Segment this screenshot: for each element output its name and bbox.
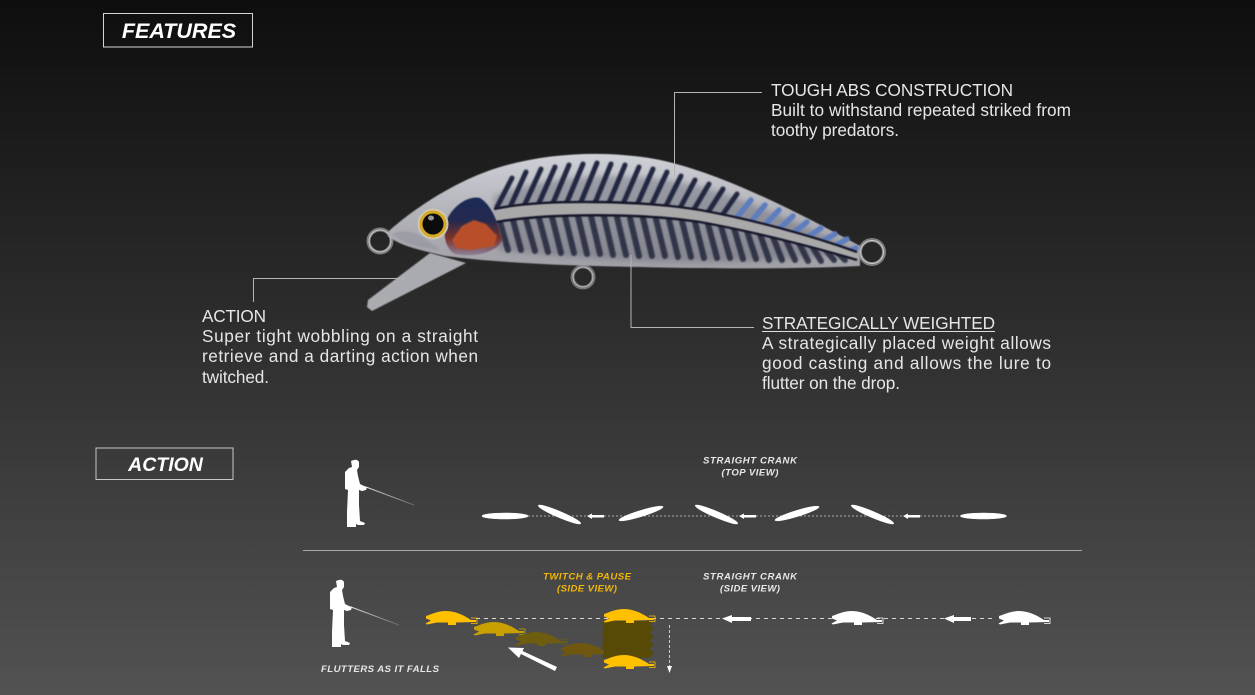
label: flutters: FLUTTERS AS IT FALLS xyxy=(321,664,440,675)
icon: nose ring xyxy=(368,230,392,252)
arrow: rising xyxy=(508,648,557,671)
icon: belly ring xyxy=(572,266,594,288)
side lure white xyxy=(998,611,1050,625)
callout: action: twitched. xyxy=(202,367,269,387)
top view lures xyxy=(482,503,1006,526)
upper blue ribs xyxy=(735,200,856,252)
heading: features: FEATURES xyxy=(122,19,237,43)
label: twitch and pause: TWITCH & PAUSE xyxy=(543,572,632,582)
falling lures xyxy=(426,611,612,657)
heading: action: ACTION xyxy=(127,454,204,476)
top view diagram xyxy=(345,456,1006,527)
lure eye xyxy=(418,208,448,240)
icon: angler xyxy=(345,460,414,527)
lure gill patch xyxy=(445,197,502,255)
lure pale spine band xyxy=(494,202,857,260)
upper ribs xyxy=(497,163,737,217)
yellow lure bottom xyxy=(604,655,655,669)
callout: tough abs construction: toothy predators. xyxy=(771,120,899,140)
lure photo xyxy=(367,154,884,311)
callout: action xyxy=(202,278,478,387)
label: straight crank side view: (SIDE VIEW) xyxy=(720,584,780,594)
callout: strategically weighted: good casting and allows the lure to xyxy=(762,353,1051,373)
heading: action xyxy=(96,448,233,480)
callout: action: Super tight wobbling on a straight xyxy=(202,326,478,346)
callout: tough abs construction xyxy=(674,80,1071,176)
lure body xyxy=(388,154,860,268)
callout: action: ACTION xyxy=(202,306,266,326)
lure spine lines xyxy=(494,202,857,260)
callout: action: retrieve and a darting action when xyxy=(202,346,478,366)
yellow lure top xyxy=(604,609,655,623)
callout: tough abs construction: Built to withstand repeated striked from xyxy=(771,100,1071,120)
label: straight crank top view xyxy=(703,456,798,478)
side lure white xyxy=(832,611,883,625)
callout: strategically weighted xyxy=(631,255,1051,393)
icon: angler xyxy=(330,580,399,647)
flutter stack xyxy=(602,621,654,658)
arrow: retrieve xyxy=(944,615,971,623)
callout: tough abs construction: TOUGH ABS CONSTRUCTION xyxy=(771,80,1013,100)
arrow: drop xyxy=(667,625,672,673)
side view diagram xyxy=(321,572,1050,675)
lower ribs xyxy=(500,216,845,261)
icon: tail ring xyxy=(860,240,884,264)
label: straight crank top view: (TOP VIEW) xyxy=(722,468,778,478)
callout: strategically weighted: STRATEGICALLY WEIGHTED xyxy=(762,313,995,333)
direction arrows xyxy=(587,514,920,519)
label: straight crank side view: STRAIGHT CRANK xyxy=(703,572,798,582)
arrow: retrieve xyxy=(722,615,751,623)
callout: strategically weighted: flutter on the drop. xyxy=(762,373,900,393)
heading: features xyxy=(104,14,252,47)
lure lip xyxy=(367,253,466,311)
label: straight crank side view xyxy=(703,572,798,594)
lure rib shading xyxy=(494,176,857,262)
label: twitch and pause xyxy=(543,572,632,594)
label: straight crank top view: STRAIGHT CRANK xyxy=(703,456,798,466)
callout: strategically weighted: A strategically placed weight allows xyxy=(762,333,1051,353)
lure head shading xyxy=(392,231,440,250)
label: twitch and pause: (SIDE VIEW) xyxy=(557,584,617,594)
